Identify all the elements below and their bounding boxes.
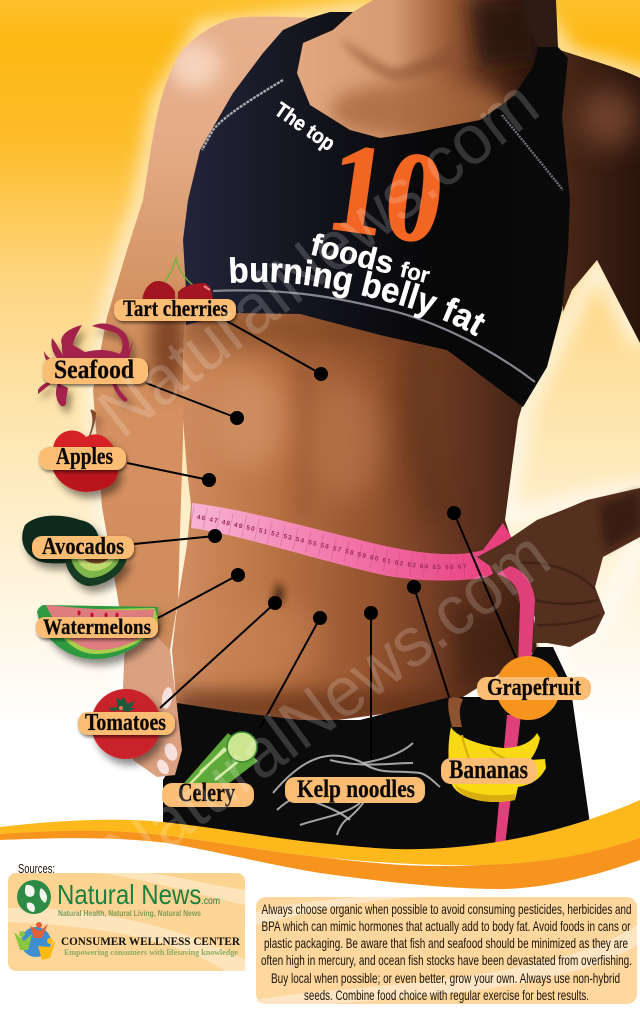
icon: cherries	[142, 258, 213, 304]
logo: Consumer Wellness wordmark: CONSUMER WELLNESS CENTER	[61, 936, 241, 948]
tape tick marks	[192, 516, 470, 567]
abdominal muscle shading	[175, 310, 545, 726]
panel swoosh	[8, 873, 245, 971]
label: Watermelons: Watermelons	[43, 614, 151, 639]
icon: kelp noodles	[273, 743, 440, 835]
label: Apples: Apples	[56, 444, 113, 470]
label: Tart cherries: Tart cherries	[123, 296, 228, 321]
right forearm and hand	[477, 488, 640, 647]
callout line: Seafood	[146, 383, 244, 425]
hanging tape end	[495, 566, 535, 845]
logo: Natural News tagline: Natural Health, Natural Living, Natural News	[58, 908, 201, 918]
left hand on hip	[123, 630, 182, 777]
advice paragraph	[261, 901, 632, 1003]
label: Grapefruit: Grapefruit	[487, 675, 581, 701]
label: Seafood: Seafood	[54, 355, 134, 384]
callout line: Tart cherries	[225, 320, 328, 381]
shorts	[163, 647, 590, 851]
title: foods for: foods for	[312, 234, 430, 282]
title	[230, 101, 486, 336]
logo: Consumer Wellness globe	[14, 922, 56, 960]
icon: tomato	[91, 689, 161, 759]
torso skin	[172, 250, 540, 725]
logo: Natural News globe	[17, 880, 51, 914]
label: Avocados: Avocados	[42, 534, 124, 560]
callout line: Tomatoes	[160, 596, 282, 708]
panel: advice text	[256, 897, 637, 1004]
sports bra	[183, 12, 570, 407]
callout line: Kelp noodles	[364, 606, 378, 760]
title: burning belly fat: burning belly fat	[230, 257, 486, 336]
icon: avocados	[22, 516, 127, 586]
watermark: upper: NaturalNews.com	[83, 64, 552, 452]
hair	[523, 0, 558, 47]
swoosh: yellow band	[0, 800, 640, 865]
sources heading: Sources:	[18, 862, 55, 876]
right upper arm	[560, 50, 640, 343]
icon: bananas	[448, 697, 546, 802]
icon: grapefruit	[496, 656, 560, 720]
neck and chest skin	[297, 0, 540, 138]
label: Celery: Celery	[178, 778, 235, 807]
navel	[273, 583, 284, 604]
left arm and shoulder	[85, 10, 320, 655]
bra stitching	[202, 80, 283, 150]
tape numbers: 46 47 48 49 50 51 52 53 54 55 56 57 58 59 60 61 62 63 64 65 66 67	[196, 514, 466, 570]
label: Kelp noodles: Kelp noodles	[297, 776, 415, 803]
icon: crab	[38, 324, 133, 406]
logo: Natural News wordmark: Natural News.com	[57, 879, 220, 910]
icon: celery	[178, 732, 258, 790]
finger creases	[520, 563, 600, 625]
panel swoosh	[256, 897, 637, 1004]
panel: sources logos	[8, 873, 245, 971]
measuring tape around the waist	[191, 503, 512, 581]
label: Tomatoes: Tomatoes	[85, 710, 166, 736]
title: The top: The top	[276, 101, 334, 152]
fingernails	[155, 686, 180, 776]
callout line: Apples	[127, 463, 216, 487]
icon: watermelon	[37, 605, 158, 659]
callout line: Watermelons	[158, 568, 245, 618]
logo: Consumer Wellness tagline: Empowering consumers with lifesaving knowledge	[64, 947, 238, 957]
callout line: Bananas	[407, 580, 449, 697]
callout line: Grapefruit	[447, 506, 516, 658]
swoosh: orange band	[0, 825, 640, 889]
title: big number 10: 10	[321, 115, 452, 271]
body halo glow	[93, 0, 640, 820]
callout line: Celery	[260, 611, 327, 728]
hand shading	[600, 490, 640, 550]
icon: apple	[53, 409, 118, 492]
watermark: lower: NaturalNews.com	[91, 515, 563, 892]
callout line: Avocados	[134, 529, 222, 544]
label: Bananas: Bananas	[449, 755, 528, 784]
